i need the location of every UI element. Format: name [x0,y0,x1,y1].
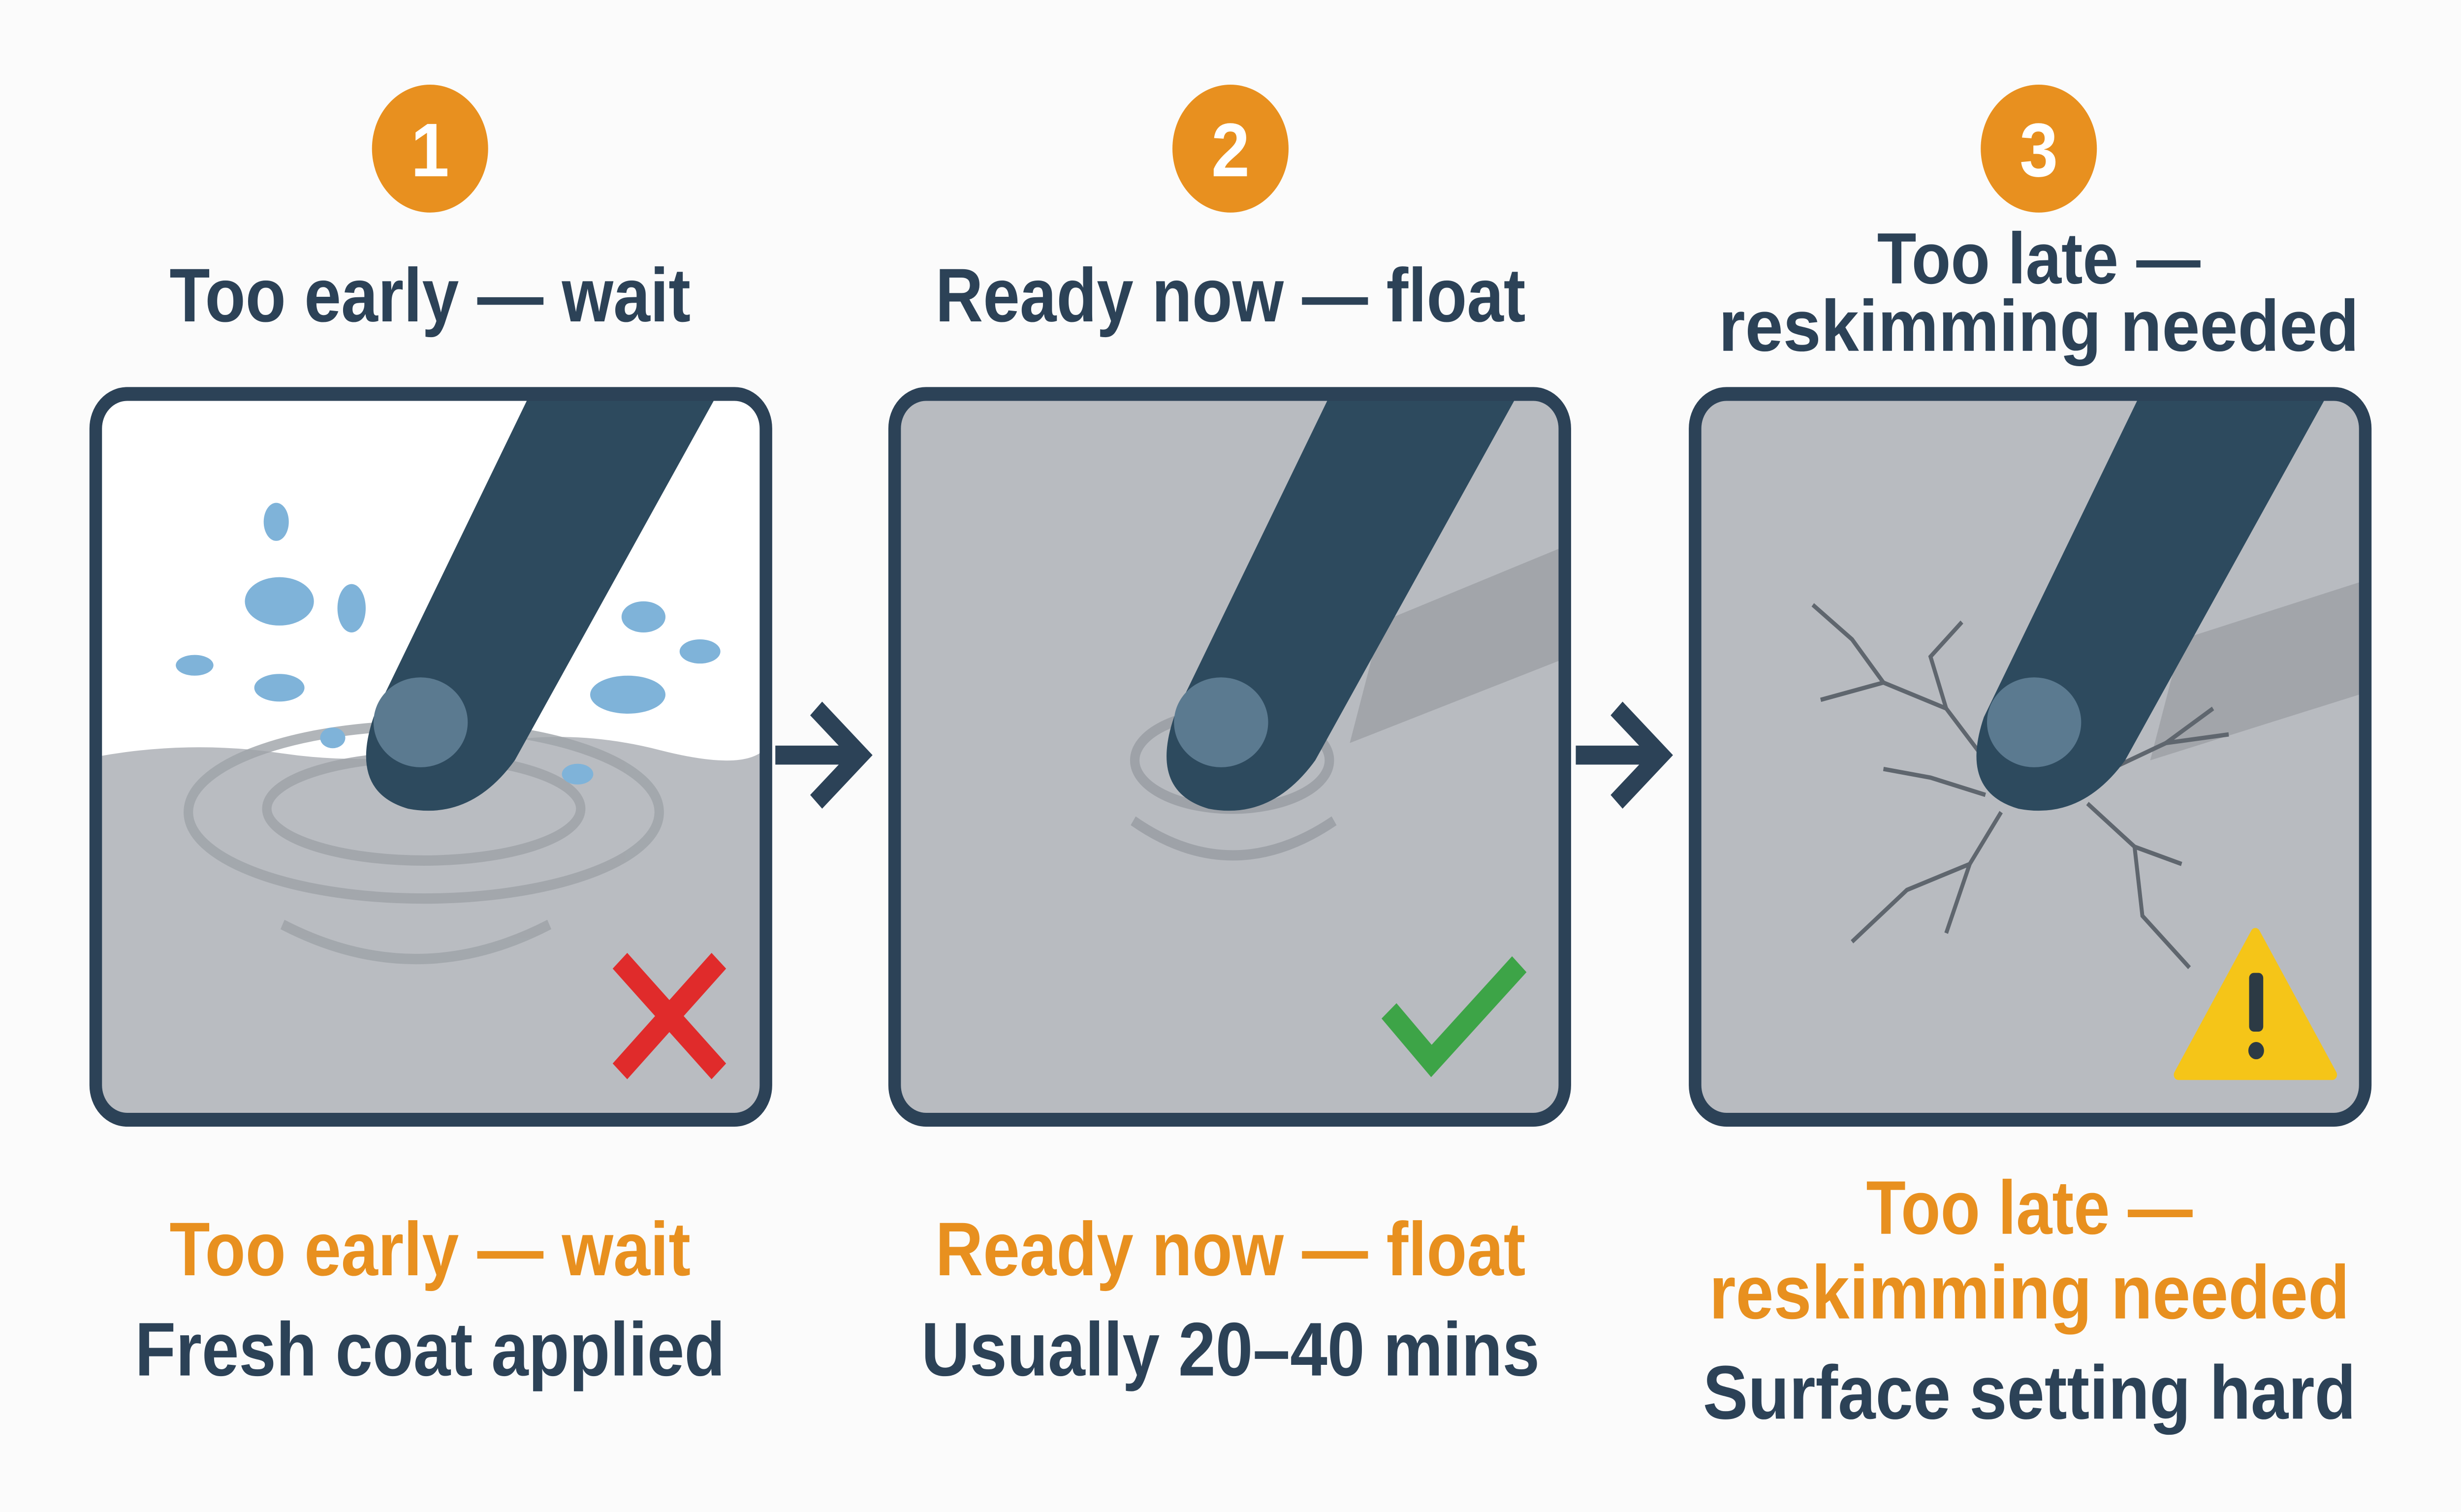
badge 3 [1981,85,2097,213]
caption 3: Surface setting hard [1703,1350,2356,1435]
icon: warning triangle [2178,933,2333,1075]
caption 3: Too late — [1866,1166,2193,1250]
caption 1 [135,1207,725,1392]
arrow 1 [775,708,860,802]
icon: finger [1167,380,1525,811]
arrow 2 [1576,708,1661,802]
heading 1: Too early — wait [169,253,691,338]
caption 2: Usually 20–40 mins [921,1307,1540,1392]
heading 3: Too late — [1877,218,2201,299]
heading 3 [1719,218,2359,366]
caption 3 [1703,1166,2356,1435]
caption 1: Too early — wait [169,1207,691,1292]
badge 2: 2 [1211,108,1250,193]
panel 2: ready surface [895,380,1570,1120]
icon: red cross [620,961,719,1071]
badge 3: 3 [2019,108,2058,193]
step 2 column [895,85,1570,1392]
heading 2: Ready now — float [936,253,1525,338]
icon: finger [366,380,725,811]
caption 1: Fresh coat applied [135,1307,725,1392]
panel 3: hardened surface [1695,380,2370,1120]
badge 1: 1 [411,108,449,193]
caption 3: reskimming needed [1709,1250,2350,1335]
badge 1 [372,85,488,213]
step 3 column [1695,85,2370,1435]
icon: finger [1976,380,2335,811]
icon: cracks [1813,605,2229,968]
badge 2 [1172,85,1289,213]
caption 2 [921,1207,1540,1392]
step 1 column [96,85,769,1392]
panel 1: wet plaster [96,380,769,1123]
caption 2: Ready now — float [936,1207,1525,1292]
icon: green check [1389,964,1519,1061]
icon: water drops [176,503,721,785]
heading 3: reskimming needed [1719,285,2359,366]
